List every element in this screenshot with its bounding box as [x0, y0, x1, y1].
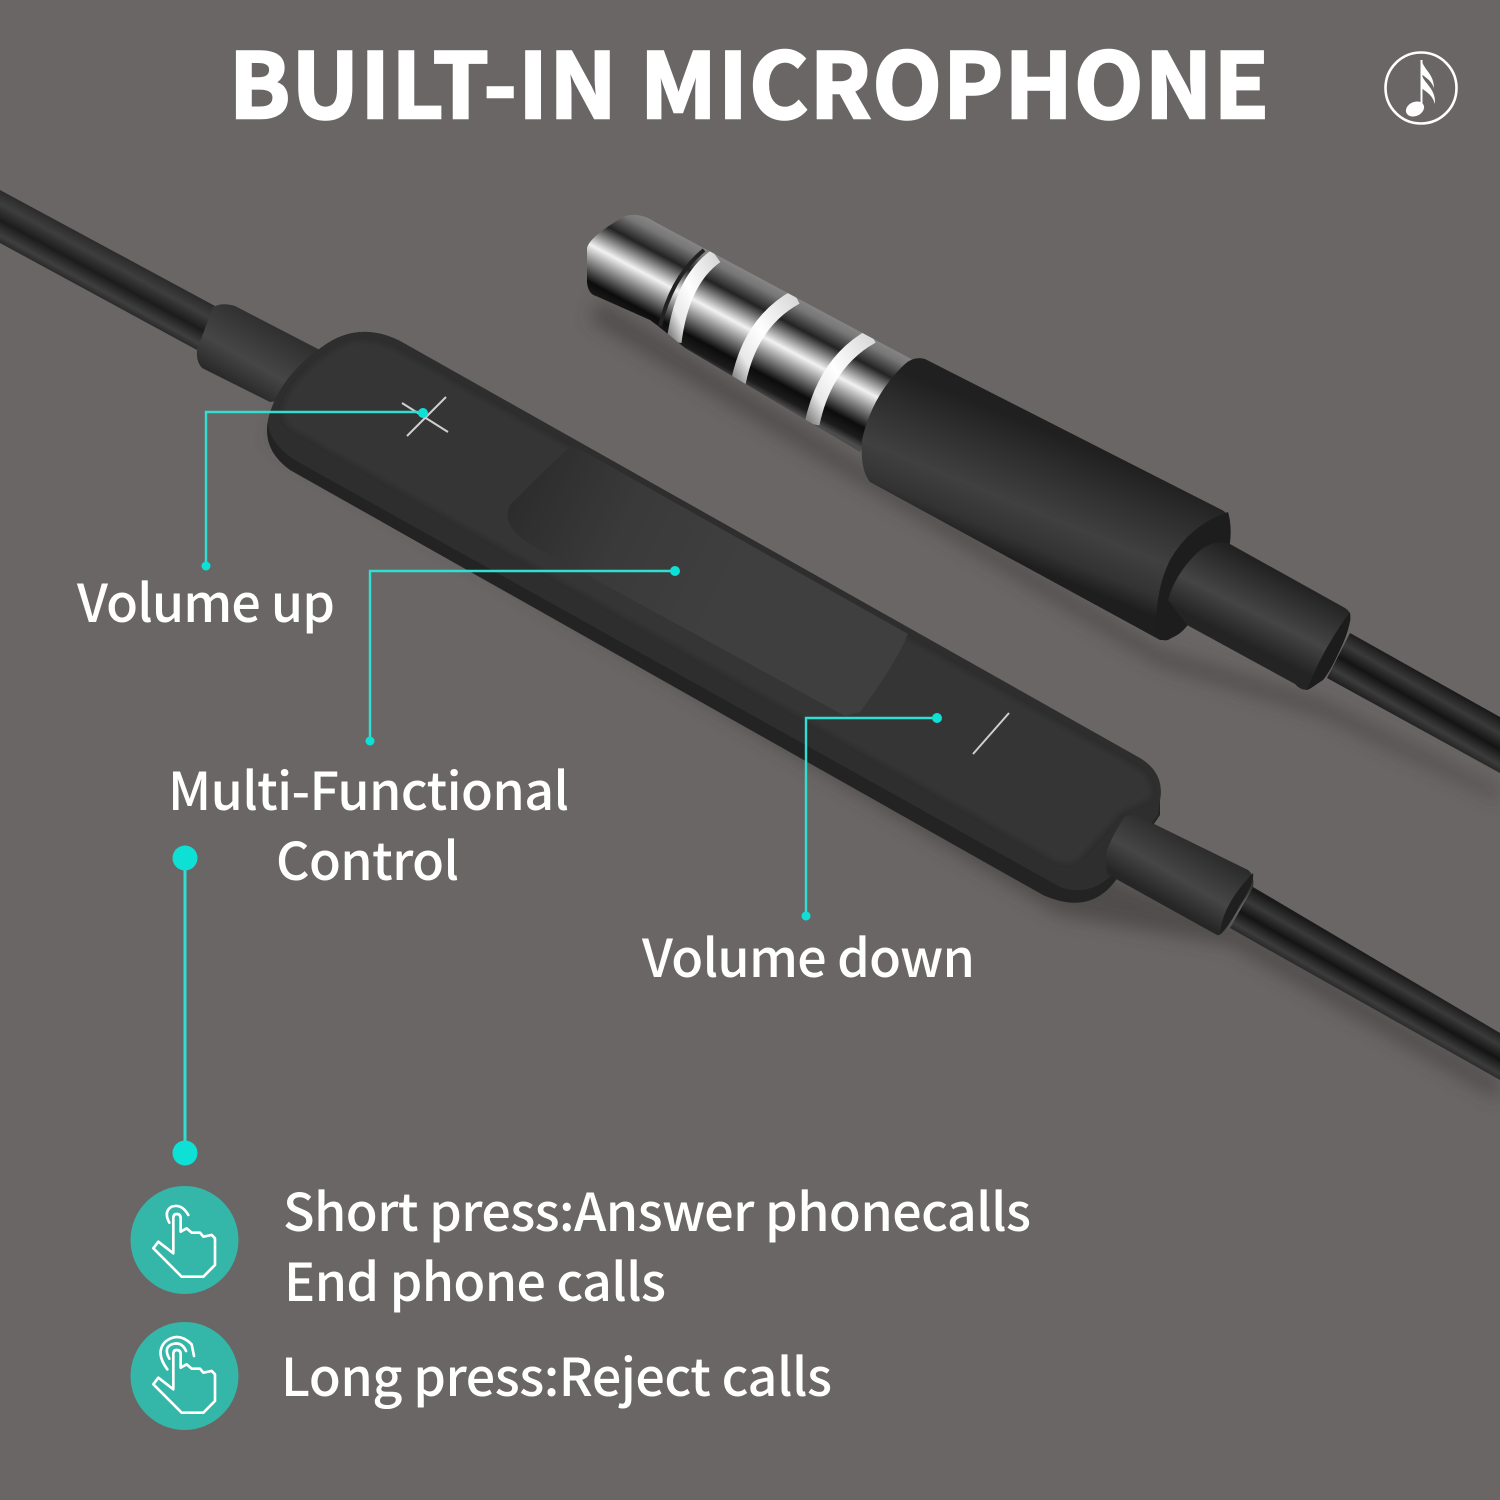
- remote bevel: [268, 332, 1161, 890]
- title: BUILT-IN MICROPHONE: [229, 14, 1269, 144]
- text: short press functions: [283, 1171, 1031, 1316]
- left collar: [197, 304, 320, 402]
- left cable: [0, 190, 215, 350]
- text: short press functions: End phone calls: [284, 1241, 666, 1316]
- icon: music note badge: [1386, 52, 1456, 124]
- inline remote cable and control: [0, 190, 1500, 1100]
- callout: volume up: [76, 408, 428, 637]
- metal plug: [587, 215, 912, 452]
- remote face: [283, 341, 1151, 863]
- text: long press function: Long press:Reject calls: [281, 1336, 832, 1411]
- remote shadow: [270, 400, 1500, 1100]
- icon: long press hand: [130, 1322, 238, 1430]
- callout: multi-functional control: Multi-Functional: [168, 750, 569, 825]
- callout: volume down: Volume down: [641, 917, 975, 992]
- callout: multi-functional control: [168, 566, 680, 895]
- strain relief collar: [1168, 542, 1350, 690]
- plug rings: [674, 256, 872, 424]
- connector line to press functions: [172, 846, 198, 1166]
- minus mark: [973, 713, 1009, 754]
- centre button: [508, 448, 908, 716]
- right cable: [1327, 633, 1500, 773]
- icon: short press hand: [130, 1186, 238, 1294]
- plus mark: [402, 397, 448, 436]
- remote body: [267, 332, 1161, 903]
- callout: multi-functional control: Control: [276, 820, 459, 895]
- lower cable: [1230, 887, 1500, 1080]
- lower collar end face: [1220, 873, 1253, 934]
- callout: volume down: [641, 713, 975, 992]
- audio jack cable and plug: [580, 205, 1500, 800]
- jack shadow: [590, 300, 1500, 800]
- callout: volume up: Volume up: [76, 562, 335, 637]
- black plug barrel: [862, 358, 1231, 640]
- text: short press functions: Short press:Answer phonecalls: [283, 1171, 1031, 1246]
- plug groove: [660, 250, 704, 326]
- lower collar: [1106, 815, 1253, 935]
